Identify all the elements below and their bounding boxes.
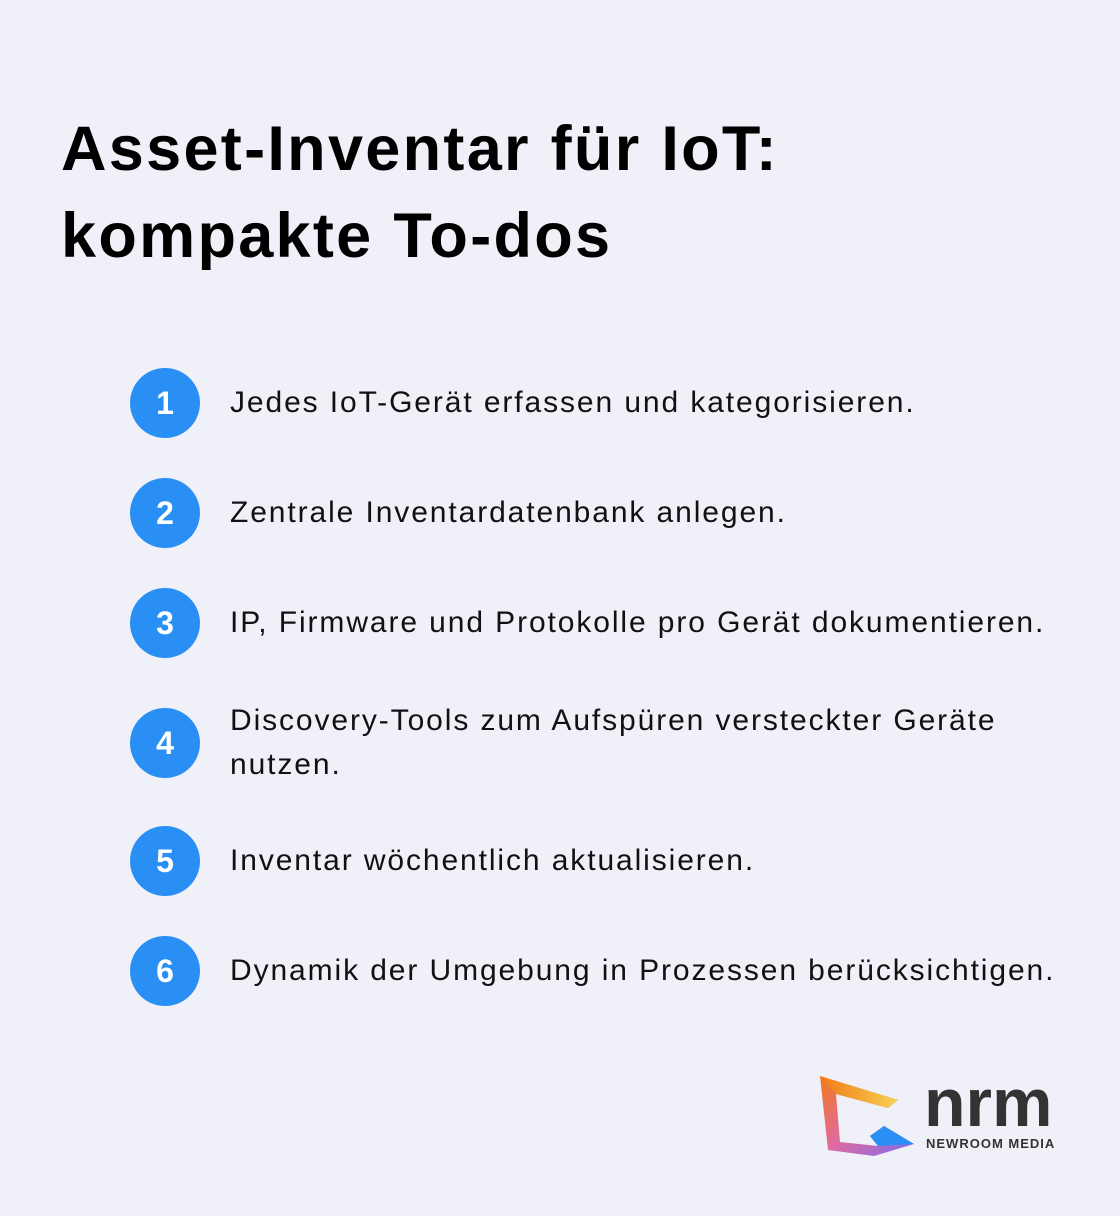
logo: NEWROOM MEDIA xyxy=(926,1136,1055,1151)
item 5: Inventar wöchentlich aktualisieren. xyxy=(230,844,755,877)
item 3: 3 xyxy=(156,605,174,641)
title: kompakte To-dos xyxy=(61,201,612,271)
title xyxy=(61,114,779,271)
item 5: 5 xyxy=(156,843,174,879)
item 2 xyxy=(130,478,787,548)
item 4: Discovery-Tools zum Aufspüren versteckter Geräte xyxy=(230,704,996,737)
item 1 xyxy=(130,368,916,438)
item 5 xyxy=(130,826,755,896)
item 3 xyxy=(130,588,1045,658)
item 1: Jedes IoT-Gerät erfassen und kategorisieren. xyxy=(230,386,916,419)
item 3: IP, Firmware und Protokolle pro Gerät dokumentieren. xyxy=(230,606,1045,639)
item 1: 1 xyxy=(156,385,174,421)
item 6: Dynamik der Umgebung in Prozessen berücksichtigen. xyxy=(230,954,1055,987)
item 6: 6 xyxy=(156,953,174,989)
item 2: 2 xyxy=(156,495,174,531)
item 4: 4 xyxy=(156,725,174,761)
item 4: nutzen. xyxy=(230,748,342,781)
logo text: nrm xyxy=(924,1065,1052,1141)
item 6 xyxy=(130,936,1055,1006)
item 2: Zentrale Inventardatenbank anlegen. xyxy=(230,496,787,529)
item 4 xyxy=(130,704,996,781)
icon: logo mark xyxy=(820,1076,914,1156)
title: Asset-Inventar für IoT: xyxy=(61,114,779,184)
logo xyxy=(820,1065,1055,1156)
